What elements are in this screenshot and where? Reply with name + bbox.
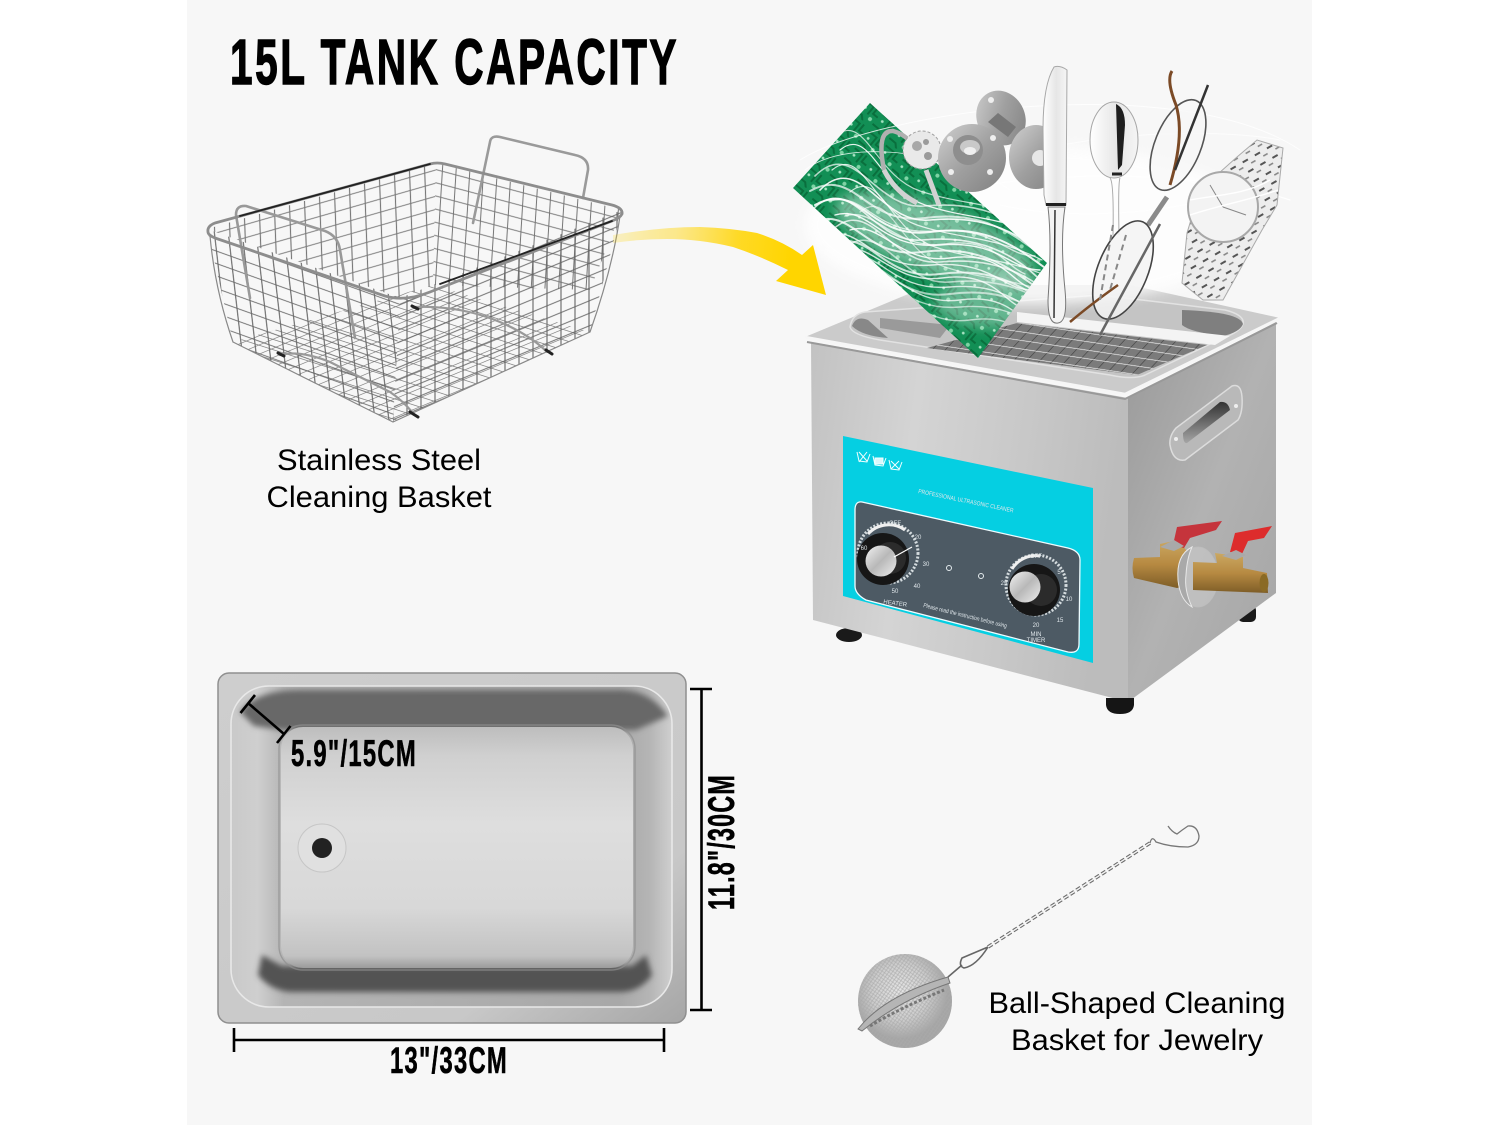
right face: [1128, 322, 1276, 702]
basket caption: [266, 444, 492, 514]
mesh sphere: [858, 954, 952, 1048]
ball-shaped jewelry basket: [858, 826, 1199, 1048]
wristwatch: [1182, 140, 1283, 300]
eyeglasses: [1070, 71, 1217, 335]
heater dial: 20: [915, 535, 922, 541]
top rim: [805, 285, 1280, 393]
width dimension: 13"/33CM: [390, 1040, 508, 1081]
depth dimension: 5.9"/15CM: [291, 733, 417, 774]
metal flanges: [938, 82, 1063, 192]
basket caption: Cleaning Basket: [266, 481, 492, 514]
jewelry basket caption: Ball-Shaped Cleaning: [988, 987, 1286, 1020]
timer dial: OFF: [1030, 554, 1042, 560]
rear feet: [836, 605, 1256, 642]
cyan control panel: [843, 436, 1093, 663]
side handle: [1170, 385, 1242, 460]
timer dial: 5: [1057, 570, 1061, 576]
timer dial: 25: [1001, 581, 1008, 587]
heater dial: 60: [861, 546, 868, 552]
arrow: basket into tank: [613, 227, 826, 295]
timer dial: 20: [1033, 623, 1040, 629]
clasp: [948, 947, 988, 977]
heater dial: [857, 521, 930, 609]
jewelry basket caption: [988, 987, 1286, 1057]
timer dial: TIMER: [1027, 638, 1046, 644]
inner basket mesh: [927, 323, 1207, 375]
knife: [1043, 66, 1067, 323]
heater dial: 30: [923, 562, 930, 568]
indicator lights: [946, 566, 984, 578]
basket caption: Stainless Steel: [277, 444, 481, 477]
ring clamp: [858, 977, 950, 1031]
soft glow behind items: [805, 145, 1255, 305]
spoon: [1090, 102, 1138, 235]
timer dial: 10: [1066, 597, 1073, 603]
instruction line: Please read the instruction before using: [923, 603, 1007, 630]
timer dial: [1001, 554, 1073, 644]
tray well: [231, 686, 672, 1007]
title: 15L TANK CAPACITY: [230, 26, 679, 98]
drain hole: [298, 824, 346, 872]
heater dial: 50: [892, 589, 899, 595]
tray floor: [281, 727, 633, 968]
drain valve: [1132, 521, 1272, 607]
hook: [1150, 826, 1199, 847]
water swirl over board: [800, 105, 1300, 350]
chain: [988, 843, 1150, 947]
width dimension: [234, 1028, 664, 1081]
page background panel: [187, 0, 1312, 1125]
stainless steel cleaning basket illustration: [207, 137, 622, 422]
panel heading: PROFESSIONAL ULTRASONIC CLEANER: [918, 489, 1014, 515]
timer dial: MIN: [1030, 632, 1042, 638]
dark dial plate: [855, 502, 1080, 652]
ring: [881, 131, 941, 205]
height dimension: 11.8"/30CM: [701, 774, 742, 910]
inner tank dimensions illustration: [218, 673, 686, 1023]
circuit board: [793, 103, 1047, 358]
heater dial: OFF: [889, 521, 901, 527]
ultrasonic cleaner unit: [793, 66, 1300, 714]
front feet: [1106, 698, 1134, 714]
heater dial: HEATER: [883, 599, 908, 609]
tank opening: [850, 295, 1243, 378]
front face: [811, 342, 1128, 702]
depth dimension: [240, 695, 417, 774]
tray rim: [218, 673, 686, 1023]
jewelry basket caption: Basket for Jewelry: [1011, 1024, 1263, 1057]
wash icons: [857, 452, 902, 470]
height dimension: [690, 689, 742, 1010]
heater dial: 40: [914, 584, 921, 590]
timer dial: 15: [1057, 618, 1064, 624]
